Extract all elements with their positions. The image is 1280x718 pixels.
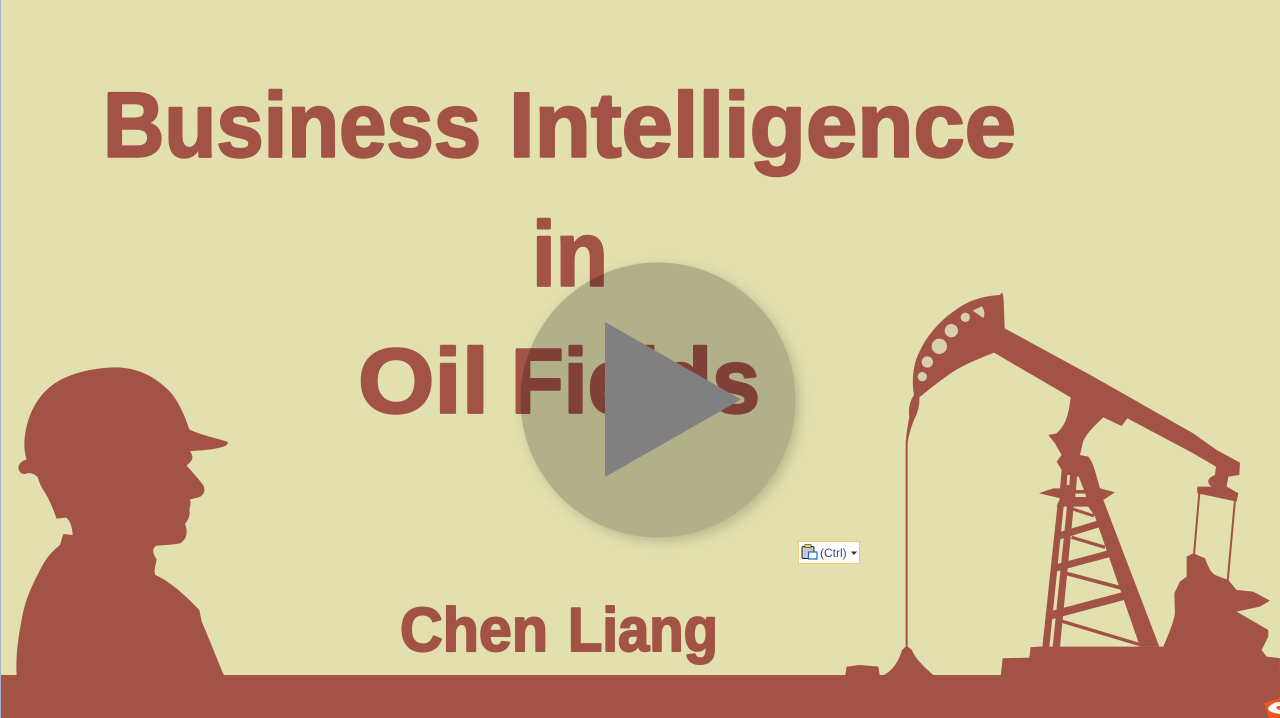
title: Intelligence <box>509 74 1016 176</box>
dropdown arrow <box>851 552 857 555</box>
play button <box>520 262 796 538</box>
counterweight and base <box>1001 553 1280 677</box>
walking beam and horsehead <box>883 293 1240 675</box>
author name: Chen <box>400 596 548 665</box>
ctrl label: (Ctrl) <box>820 546 847 560</box>
button shadow <box>525 267 799 541</box>
derrick legs <box>1042 503 1064 647</box>
title: Oil <box>358 330 489 432</box>
polished rod bridle <box>1194 493 1235 582</box>
pump jack silhouette <box>845 293 1280 677</box>
play triangle <box>605 322 741 477</box>
button disc <box>520 262 796 538</box>
title: in <box>532 204 608 306</box>
worker silhouette <box>16 367 228 675</box>
ground strip <box>1 675 1280 718</box>
author name: Liang <box>568 596 718 665</box>
horsehead holes <box>918 306 984 381</box>
corner watermark <box>1264 698 1280 718</box>
derrick neck holes <box>1067 475 1086 497</box>
title <box>103 74 1016 432</box>
clipboard icon <box>802 544 817 559</box>
paste options tag <box>798 542 860 564</box>
author name <box>400 596 718 665</box>
derrick braces <box>1048 509 1141 645</box>
small block <box>845 665 880 677</box>
title: Business <box>103 74 481 176</box>
title: Fields <box>511 330 760 432</box>
